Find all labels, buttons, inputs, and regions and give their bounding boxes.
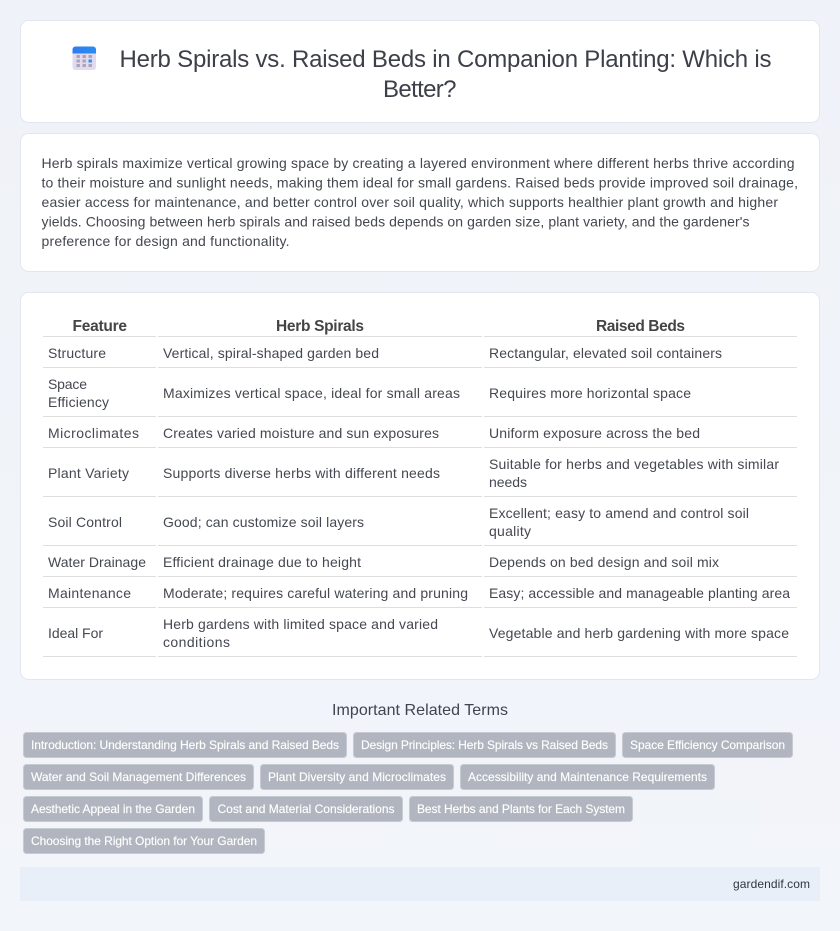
row: ideal for [48,616,789,650]
footer: gardendif.com [733,877,810,891]
title [120,46,772,103]
title: Herb Spirals vs. Raised Beds in Companion Planting: Which is [120,46,772,73]
row: soil control: Excellent; easy to amend and control soil [489,505,749,521]
row: microclimates [48,425,700,441]
text block: summary: easier access for maintenance, and better control over soil quality, which supports healthier plant growth and higher [42,194,778,210]
row: soil control: Soil Control [48,514,122,530]
tag: introduction: Introduction: Understanding Herb Spirals and Raised Beds [31,738,339,752]
row: water drainage [48,554,719,570]
row: structure: Rectangular, elevated soil containers [489,345,722,361]
row: plant variety: Plant Variety [48,465,129,481]
row: soil control [48,505,749,539]
related term tags [24,732,792,854]
panel: comparison table [20,292,820,680]
tag: aesthetic appeal: Aesthetic Appeal in the Garden [31,802,195,816]
tag: water and soil: Water and Soil Management Differences [31,770,246,784]
text block: summary: preference for design and functionality. [42,233,290,249]
row: structure: Vertical, spiral-shaped garden bed [163,345,379,361]
tag: design principles [354,732,616,758]
row: space efficiency: Space [48,376,87,392]
row: space efficiency: Requires more horizontal space [489,385,691,401]
row: microclimates: Microclimates [48,425,139,441]
row: space efficiency: Maximizes vertical space, ideal for small areas [163,385,460,401]
table header row: Feature [72,318,127,335]
table header row: Raised Beds [596,318,685,335]
tag: aesthetic appeal [24,796,202,822]
row: space efficiency [48,376,691,410]
row: ideal for: Vegetable and herb gardening with more space [489,625,789,641]
tag: plant diversity [260,764,454,790]
row: structure: Structure [48,345,106,361]
row: microclimates: Uniform exposure across the bed [489,425,700,441]
row: soil control: Good; can customize soil layers [163,514,364,530]
tag: choosing the right option: Choosing the Right Option for Your Garden [31,834,257,848]
row: structure [48,345,722,361]
row: water drainage: Efficient drainage due to height [163,554,361,570]
row: plant variety: Supports diverse herbs with different needs [163,465,440,481]
row: ideal for: conditions [163,634,230,650]
tag: space efficiency: Space Efficiency Comparison [630,738,785,752]
tag: introduction [24,732,346,758]
row: plant variety [48,456,779,490]
footer [20,867,820,901]
text block: summary: to their moisture and sunlight needs, making them ideal for small gardens. Raised beds provide improved soil drainage, [42,174,798,190]
row: ideal for: Herb gardens with limited space and varied [163,616,438,632]
panel: header [20,20,820,122]
text block: summary: yields. Choosing between herb spirals and raised beds depends on garden size, plant variety, and the gardener's [42,214,750,230]
tag: choosing the right option [24,828,264,854]
tag: accessibility [460,764,714,790]
row: water drainage: Water Drainage [48,554,146,570]
tag: space efficiency [622,732,792,758]
tag: water and soil [24,764,254,790]
text block: summary [42,155,798,249]
row: ideal for: Ideal For [48,625,103,641]
panel: summary paragraph [20,134,820,272]
row: space efficiency: Efficiency [48,394,109,410]
row: soil control: quality [489,523,531,539]
title: Better? [383,76,456,103]
tag: best herbs [410,796,632,822]
tag: best herbs: Best Herbs and Plants for Each System [417,802,625,816]
tag: plant diversity: Plant Diversity and Microclimates [268,770,446,784]
tag: cost and material [210,796,402,822]
row: maintenance: Maintenance [48,585,131,601]
row: maintenance [48,585,790,601]
row: maintenance: Easy; accessible and manageable planting area [489,585,790,601]
tag: design principles: Design Principles: Herb Spirals vs Raised Beds [361,738,608,752]
row: plant variety: needs [489,474,527,490]
row: plant variety: Suitable for herbs and vegetables with similar [489,456,779,472]
tag: cost and material: Cost and Material Considerations [218,802,394,816]
row: maintenance: Moderate; requires careful watering and pruning [163,585,468,601]
row: microclimates: Creates varied moisture and sun exposures [163,425,439,441]
text block: summary: Herb spirals maximize vertical growing space by creating a layered environment where different herbs thrive according [42,155,794,171]
row: water drainage: Depends on bed design and soil mix [489,554,719,570]
tag: accessibility: Accessibility and Maintenance Requirements [468,770,707,784]
table header row: Herb Spirals [276,318,364,335]
icon: calendar [72,46,96,70]
table header row [72,318,685,335]
heading: important related terms: Important Related Terms [332,702,508,719]
